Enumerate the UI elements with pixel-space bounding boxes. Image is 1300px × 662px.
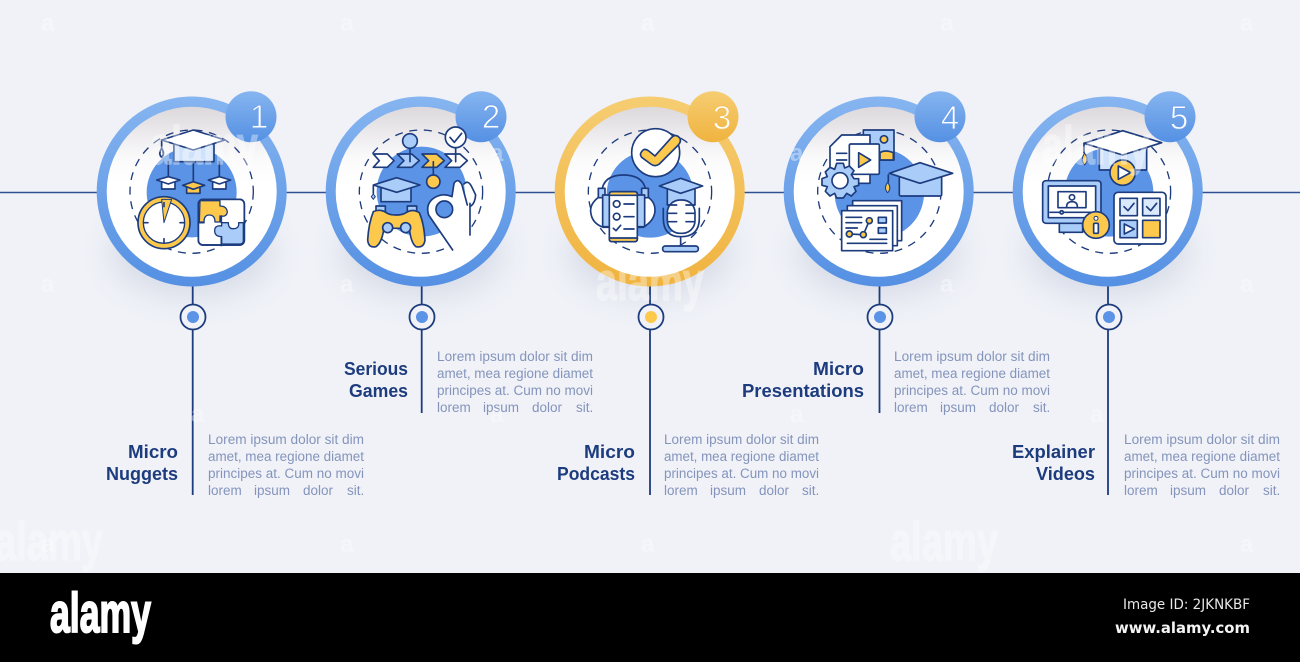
ring 3	[555, 96, 745, 286]
body text 3: amet, mea regione diamet	[664, 449, 819, 464]
watermarks: a	[490, 401, 504, 428]
watermarks: a	[940, 10, 954, 37]
body text 4: sit.	[1033, 400, 1050, 415]
footer logo: alamy	[50, 581, 151, 644]
badge 4: 4	[941, 99, 959, 136]
heading 4: Presentations	[742, 381, 864, 401]
badge 2	[456, 91, 506, 142]
icon: podcast phone microphone	[588, 129, 712, 253]
watermarks: a	[790, 401, 804, 428]
body text 2: lorem	[437, 400, 471, 415]
body text 3: ipsum	[710, 483, 746, 498]
body text 1: principes at. Cum no movi	[208, 466, 364, 481]
body text 2: Lorem ipsum dolor sit dim	[437, 349, 593, 364]
body text 5: principes at. Cum no movi	[1124, 466, 1280, 481]
ring 5	[1013, 96, 1203, 286]
body text 3: Lorem ipsum dolor sit dim	[664, 432, 819, 447]
heading 3: Micro	[584, 442, 635, 462]
icon: monitor video grid	[1043, 130, 1171, 253]
body text 4: lorem	[894, 400, 928, 415]
watermarks: a	[490, 140, 504, 167]
body text 3: principes at. Cum no movi	[664, 466, 819, 481]
body text 5: amet, mea regione diamet	[1124, 449, 1280, 464]
badge 4	[914, 91, 966, 142]
stem 4	[878, 286, 880, 413]
badge 5: 5	[1170, 99, 1188, 136]
ring 2	[326, 96, 516, 286]
badge 1	[226, 91, 276, 142]
body text 4: dolor	[989, 400, 1020, 415]
icon: cap clock puzzle	[130, 130, 253, 253]
badge 1: 1	[250, 98, 268, 135]
badge 5	[1144, 91, 1196, 142]
node dot 3	[638, 304, 664, 330]
body text 1: ipsum	[254, 483, 290, 498]
body text 3: dolor	[759, 483, 790, 498]
node dot 5	[1096, 304, 1122, 330]
body text 1: amet, mea regione diamet	[208, 449, 364, 464]
ring 1	[97, 96, 287, 286]
stem 2	[421, 286, 423, 413]
watermarks: a	[790, 140, 804, 167]
stem 1	[192, 286, 194, 495]
body text 4: amet, mea regione diamet	[894, 366, 1050, 381]
badge 3: 3	[713, 99, 731, 136]
heading 4: Micro	[813, 359, 864, 379]
panel: step 1 micro nuggets	[97, 91, 364, 498]
body text 2: principes at. Cum no movi	[437, 383, 593, 398]
timeline line	[0, 192, 1300, 194]
body text 5: ipsum	[1170, 483, 1206, 498]
heading 1: Micro	[128, 442, 178, 462]
icon: game controller cap hand	[359, 127, 483, 253]
body text 5: lorem	[1124, 483, 1158, 498]
panel: step 2 serious games	[326, 91, 593, 415]
heading 2: Games	[349, 381, 408, 401]
watermarks: a	[641, 531, 655, 558]
icon: slides gear cap	[818, 130, 953, 253]
watermarks: a	[641, 10, 655, 37]
body text 4: Lorem ipsum dolor sit dim	[894, 349, 1050, 364]
watermarks: a	[340, 271, 354, 298]
watermarks: a	[1240, 531, 1254, 558]
panel: step 5 explainer videos	[1012, 91, 1280, 498]
body text 4: ipsum	[940, 400, 976, 415]
body text 1: dolor	[303, 483, 334, 498]
body text 3: sit.	[802, 483, 819, 498]
stem 3	[649, 286, 651, 495]
body text 1: sit.	[347, 483, 364, 498]
panel: step 4 micro presentations	[742, 91, 1050, 415]
heading 3: Podcasts	[557, 464, 635, 484]
footer bar	[0, 573, 1300, 662]
watermarks: a	[340, 10, 354, 37]
watermarks: a	[41, 531, 55, 558]
body text 5: Lorem ipsum dolor sit dim	[1124, 432, 1280, 447]
heading 5: Explainer	[1012, 442, 1095, 462]
watermarks: a	[1090, 401, 1104, 428]
body text 1: lorem	[208, 483, 242, 498]
body text 1: Lorem ipsum dolor sit dim	[208, 432, 364, 447]
body text 5: dolor	[1219, 483, 1250, 498]
heading 5: Videos	[1036, 464, 1095, 484]
body text 2: dolor	[532, 400, 563, 415]
watermarks: alamy	[596, 252, 704, 312]
heading 2: Serious	[344, 359, 408, 379]
watermarks: a	[940, 271, 954, 298]
image id: Image ID: 2JKNKBF	[1123, 597, 1250, 613]
heading 1: Nuggets	[106, 464, 178, 484]
footer url: www.alamy.com	[1115, 619, 1250, 637]
body text 3: lorem	[664, 483, 698, 498]
watermarks: a	[41, 271, 55, 298]
watermarks: alamy	[1042, 116, 1150, 176]
watermarks: alamy	[890, 512, 998, 572]
panel: step 3 micro podcasts	[555, 91, 819, 498]
body text 2: amet, mea regione diamet	[437, 366, 593, 381]
watermarks: a	[340, 531, 354, 558]
badge 3	[688, 91, 738, 142]
watermarks: a	[1240, 271, 1254, 298]
watermarks: a	[1240, 10, 1254, 37]
badge 2: 2	[482, 98, 500, 135]
node dot 2	[410, 304, 434, 330]
body text 5: sit.	[1263, 483, 1280, 498]
stem 5	[1107, 286, 1109, 495]
node dot 4	[868, 304, 892, 330]
body text 4: principes at. Cum no movi	[894, 383, 1050, 398]
watermarks: a	[191, 401, 205, 428]
watermarks: a	[41, 10, 55, 37]
ring 4	[784, 96, 974, 286]
watermarks: alamy	[150, 116, 258, 176]
node dot 1	[180, 304, 206, 330]
body text 2: sit.	[576, 400, 593, 415]
body text 2: ipsum	[483, 400, 519, 415]
